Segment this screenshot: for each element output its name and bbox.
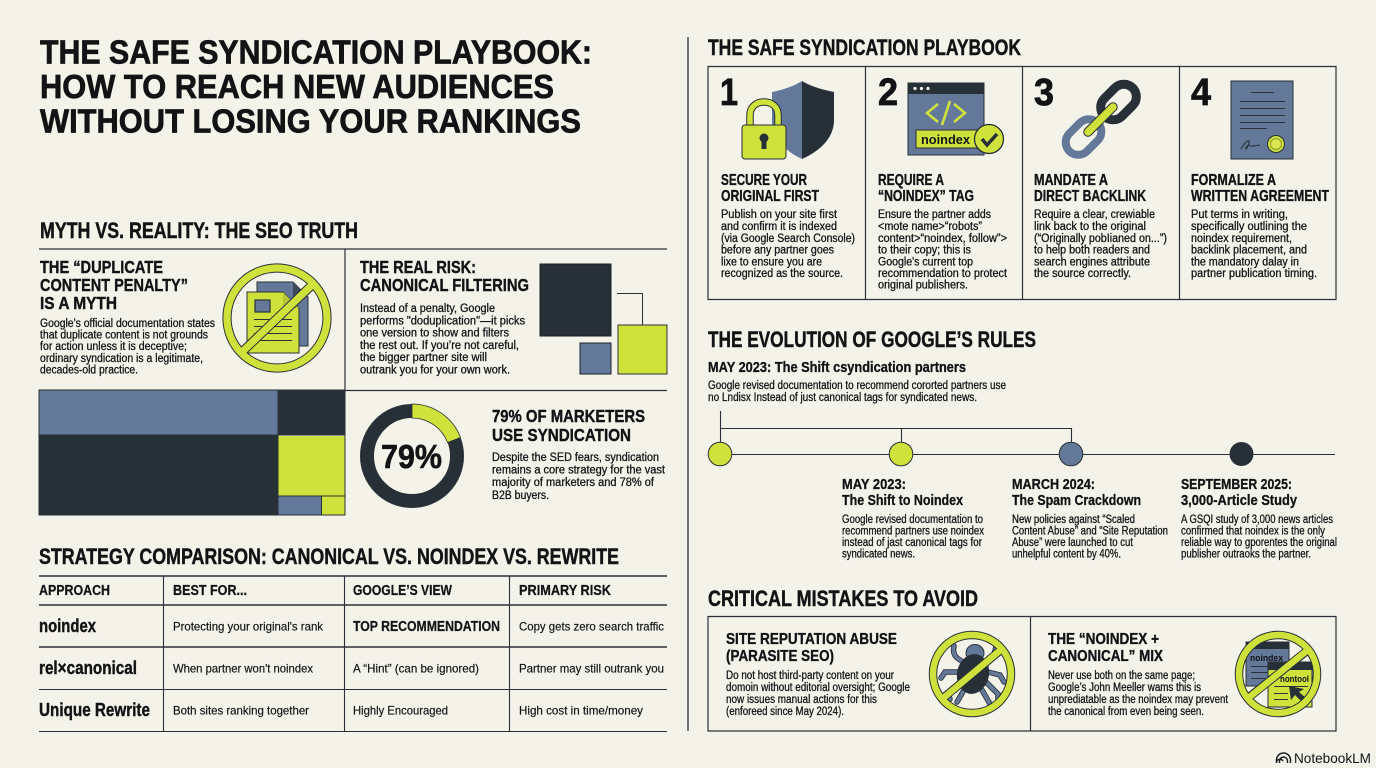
step 4 (1191, 72, 1329, 280)
timeline entry: march 2024: Content Abuse” and “Site Reputation (1012, 526, 1168, 538)
table row: noindex: Protecting your original's rank (173, 620, 323, 634)
timeline entry: march 2024: MARCH 2024: (1012, 477, 1095, 493)
table row: rel canonical: rel×canonical (39, 658, 137, 678)
icon: crossed-out conflicting tags: noindex (1250, 653, 1284, 664)
mistake: noindex plus canonical mix: Never use both on the same page; (1048, 670, 1195, 682)
table row: unique rewrite: High cost in time/money (519, 704, 643, 718)
text: step 2: Google's current top (878, 256, 973, 268)
mistake: site reputation abuse: SITE REPUTATION ABUSE (726, 631, 897, 648)
panel: marketers stat (492, 406, 666, 502)
text: step 2: original publishers. (878, 280, 968, 292)
text: step 4: FORMALIZE A (1191, 172, 1276, 189)
icon: crossed-out duplicate documents (227, 268, 327, 368)
icon: noindex code window (908, 83, 1004, 155)
text: step 3: to help both readers and (1034, 244, 1150, 256)
timeline entry: september 2025: 3,000-Article Study (1181, 493, 1297, 509)
text: marketers explanation: remains a core strategy for the vast (492, 464, 666, 476)
table row: rel canonical: Partner may still outrank you (519, 662, 664, 676)
icon: noindex code window: noindex (921, 132, 971, 147)
heading: duplicate content penalty: THE “DUPLICATE (40, 257, 163, 277)
text: may 2023 intro: MAY 2023: The Shift csyndication partners (708, 360, 966, 376)
chart: treemap (39, 390, 345, 515)
text: step 1: (via Google Search Console) (721, 233, 855, 245)
step 3 (1034, 72, 1167, 280)
text: may 2023 intro: Google revised documentation to recommend cororted partners use (708, 380, 1006, 392)
table row: noindex (39, 616, 664, 636)
text: step 4: WRITTEN AGREEMENT (1191, 188, 1329, 205)
heading: duplicate content penalty: CONTENT PENALTY” (40, 275, 188, 295)
text: canonical filtering explanation: Instead of a penalty, Google (360, 303, 495, 315)
text: duplicate content explanation: Google's official documentation states (40, 318, 215, 330)
table row: noindex: Copy gets zero search traffic (519, 620, 664, 634)
text: step 2: “NOINDEX” TAG (878, 188, 974, 205)
text: step 4: noindex requirement, (1191, 233, 1292, 245)
heading: duplicate content penalty: IS A MYTH (40, 293, 117, 313)
text: step 1: Publish on your site first (721, 209, 838, 221)
timeline entry: may 2023 (842, 477, 984, 560)
table row: unique rewrite: Unique Rewrite (39, 700, 150, 720)
step 2 (878, 72, 1008, 292)
text: marketers explanation: B2B buyers. (492, 490, 549, 502)
text: step 3: search engines attribute (1034, 256, 1150, 268)
mistake: noindex plus canonical mix: THE “NOINDEX + (1048, 631, 1159, 648)
timeline entry: march 2024: unhelpful content by 40%. (1012, 548, 1121, 560)
text: duplicate content explanation: for action unless it is deceptive; (40, 341, 187, 353)
icon: crossed-out spider (933, 635, 1011, 713)
mistake: site reputation abuse: Do not host third-party content on your (726, 670, 894, 682)
title: THE SAFE SYNDICATION PLAYBOOK: (40, 34, 592, 70)
text: duplicate content explanation: that duplicate content is not grounds (40, 330, 208, 342)
heading: strategy comparison: STRATEGY COMPARISON: CANONICAL VS. NOINDEX VS. REWRITE (39, 544, 619, 569)
icon: crossed-out conflicting tags: hontool (1280, 674, 1309, 684)
text: canonical filtering explanation: one version to show and filters (360, 328, 509, 340)
diagram: filtered squares (540, 264, 667, 374)
timeline entry: march 2024: The Spam Crackdown (1012, 493, 1141, 509)
text: canonical filtering explanation: the bigger partner site will (360, 352, 487, 364)
text: step 2: <mote name>“robots” (878, 221, 982, 233)
text: step 3: (“Originally pobIianed on...”) (1034, 233, 1167, 245)
mistake: noindex plus canonical mix: CANONICAL” MIX (1048, 648, 1164, 665)
step 1 (720, 72, 855, 280)
step 3: 3 (1034, 72, 1054, 114)
text: marketers explanation: Despite the SED fears, syndication (492, 452, 659, 464)
step 2: 2 (878, 72, 898, 114)
text: step 4: the mandatory dalay in (1191, 256, 1299, 268)
text: step 3: Require a clear, crewiable (1034, 209, 1155, 221)
text: step 1: SECURE YOUR (721, 172, 807, 189)
timeline entry: september 2025: SEPTEMBER 2025: (1181, 477, 1292, 493)
table row: noindex: TOP RECOMMENDATION (353, 619, 500, 635)
text: duplicate content explanation: decades-old practice. (40, 364, 138, 376)
table header: GOOGLE’S VIEW (353, 583, 452, 599)
text: step 4: backlink placement, and (1191, 244, 1307, 256)
text: step 2: Ensure the partner adds (878, 209, 991, 221)
text: duplicate content explanation: ordinary syndication is a legitimate, (40, 353, 203, 365)
heading: 79% of marketers (492, 406, 645, 445)
text: step 2: content>“noindex, follow”> (878, 233, 1007, 245)
heading: real risk: CANONICAL FILTERING (360, 275, 529, 295)
mistake: site reputation abuse: (PARASITE SEO) (726, 648, 834, 665)
text: step 1: before any partner goes (721, 244, 834, 256)
text: step 1: lixe to ensure you are (721, 256, 822, 268)
timeline entry: september 2025: publisher outraoks the partner. (1181, 548, 1311, 560)
text: step 4: Put terms in writing, (1191, 209, 1288, 221)
timeline entry: march 2024: New policies against “Scaled (1012, 514, 1135, 526)
mistake: site reputation abuse: (enforeed since May 2024). (726, 706, 844, 718)
table header: APPROACH (39, 583, 110, 599)
timeline entry: september 2025: confirmed that noindex is the only (1181, 526, 1325, 538)
mistake: site reputation abuse: now issues manual actions for this (726, 694, 877, 706)
table: strategy comparison (39, 576, 667, 732)
heading: evolution of google's rules: THE EVOLUTION OF GOOGLE’S RULES (708, 327, 1036, 352)
text: may 2023 intro: no Lndisx Instead of just canonical tags for syndicated news. (708, 392, 977, 404)
panel: duplicate content myth (40, 257, 327, 376)
chart: 79% donut: 79% (381, 438, 442, 475)
timeline entry: may 2023: recommend partners use noindex (842, 526, 984, 538)
heading: critical mistakes: CRITICAL MISTAKES TO AVOID (708, 586, 978, 611)
timeline entry: may 2023: instead of jast canonical tags for (842, 537, 982, 549)
text: canonical filtering explanation: performs "doduplication"—it picks (360, 316, 525, 328)
table row: rel canonical: When partner won't noindex (173, 662, 313, 676)
table row: unique rewrite: Both sites ranking together (173, 704, 309, 718)
text: step 2 (878, 172, 1008, 292)
logo: NotebookLM: NotebookLM (1294, 750, 1371, 766)
text: step 3: link back to the original (1034, 221, 1146, 233)
mistake: site reputation abuse: domoin without editorial oversight; Google (726, 682, 910, 694)
text: step 4: partner publication timing. (1191, 268, 1317, 280)
timeline entry: may 2023: Google revised documentation to (842, 514, 983, 526)
text: step 3: DIRECT BACKLINK (1034, 188, 1147, 205)
timeline entry: march 2024 (1012, 477, 1168, 560)
icon: chain link (1061, 79, 1141, 160)
text: step 4: specifically outlining the (1191, 221, 1307, 233)
mistake: noindex plus canonical mix: the canonical from even being seen. (1048, 706, 1204, 718)
mistake: noindex plus canonical mix (1048, 631, 1229, 718)
timeline entry: may 2023: syndicated news. (842, 548, 915, 560)
text: step 1: ORIGINAL FIRST (721, 188, 819, 205)
chart: timeline (708, 411, 1335, 466)
text: marketers explanation (492, 452, 666, 502)
table header (39, 583, 611, 599)
timeline entry: september 2025: A GSQI study of 3,000 news articles (1181, 514, 1333, 526)
step 1: 1 (720, 72, 738, 114)
title: HOW TO REACH NEW AUDIENCES (40, 68, 554, 105)
text: may 2023 intro (708, 360, 1006, 404)
heading: real risk (360, 257, 529, 295)
text: step 1: recognized as the source. (721, 268, 843, 280)
timeline entry: september 2025: reliable way to gporentes the original (1181, 537, 1337, 549)
text: canonical filtering explanation: the rest out. If you’re not careful, (360, 340, 519, 352)
panel: canonical filtering risk (360, 257, 667, 376)
panel: critical mistakes (708, 616, 1336, 731)
heading: duplicate content penalty (40, 257, 188, 313)
table row: unique rewrite (39, 700, 643, 720)
table row: rel canonical (39, 658, 664, 678)
table row: unique rewrite: Highly Encouraged (353, 704, 448, 718)
title (40, 34, 592, 139)
mistake: site reputation abuse (726, 631, 910, 718)
text: step 2: to their copy; this is (878, 244, 971, 256)
table header: BEST FOR... (173, 583, 247, 599)
timeline entry: march 2024: Abuse” were launched to cut (1012, 537, 1134, 549)
table row: noindex: noindex (39, 616, 96, 636)
text: step 3: the source correctly. (1034, 268, 1131, 280)
heading: 79% of marketers: 79% OF MARKETERS (492, 406, 645, 426)
heading: safe syndication playbook: THE SAFE SYNDICATION PLAYBOOK (708, 35, 1021, 60)
step 4: 4 (1191, 72, 1211, 114)
text: step 3: MANDATE A (1034, 172, 1108, 189)
text: canonical filtering explanation (360, 303, 525, 376)
panel: playbook steps (708, 66, 1336, 300)
icon: crossed-out conflicting tags (1239, 635, 1317, 713)
heading: real risk: THE REAL RISK: (360, 257, 476, 277)
text: duplicate content explanation (40, 318, 215, 376)
timeline entry: may 2023: MAY 2023: (842, 477, 906, 493)
icon: signed agreement (1231, 81, 1293, 159)
text: step 2: REQUIRE A (878, 172, 944, 189)
text: step 4 (1191, 172, 1329, 280)
text: step 1 (721, 172, 855, 280)
text: marketers explanation: majority of marketers and 78% of (492, 477, 655, 489)
title: WITHOUT LOSING YOUR RANKINGS (40, 102, 581, 139)
chart: 79% donut (367, 404, 460, 501)
icon: lock and shield (742, 81, 834, 159)
heading: myth vs reality: MYTH VS. REALITY: THE SEO TRUTH (40, 218, 358, 243)
timeline entry: september 2025 (1181, 477, 1337, 560)
text: step 2: recommendation to protect (878, 268, 1008, 280)
mistake: noindex plus canonical mix: Google’s John Meeller wams this is (1048, 682, 1201, 694)
table header: PRIMARY RISK (519, 583, 611, 599)
timeline entry: may 2023: The Shift to Noindex (842, 493, 963, 509)
table row: rel canonical: A “Hint” (can be ignored) (353, 662, 479, 676)
text: canonical filtering explanation: outrank you for your own work. (360, 364, 510, 376)
heading: 79% of marketers: USE SYNDICATION (492, 425, 631, 445)
mistake: noindex plus canonical mix: unprediatable as the noindex may prevent (1048, 694, 1229, 706)
text: step 3 (1034, 172, 1167, 280)
text: step 1: and confirm it is indexed (721, 221, 837, 233)
